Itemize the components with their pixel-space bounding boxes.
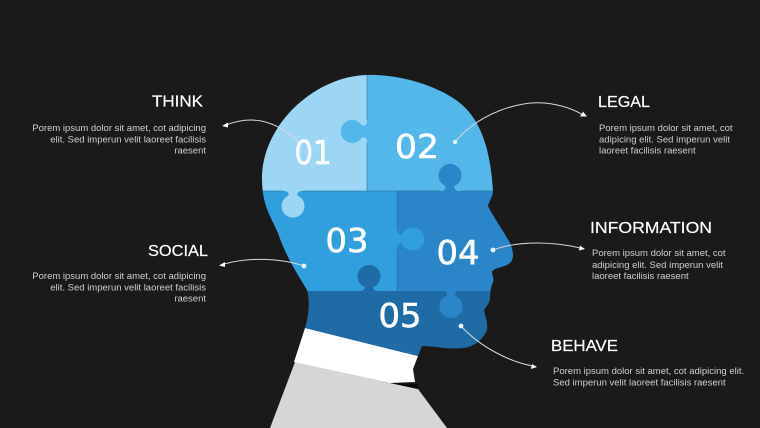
- text: legal: [599, 123, 733, 156]
- number 02: 02: [395, 127, 439, 166]
- connector: information: [491, 243, 585, 252]
- piece 03: [250, 191, 397, 291]
- heading: social: SOCIAL: [148, 243, 208, 260]
- text: think: elit. Sed imperun velit laoreet facilisis: [50, 134, 206, 146]
- knob: 01 into 03: [282, 190, 304, 218]
- knob: 04 into 02: [438, 164, 462, 192]
- number 01: 01: [294, 133, 332, 172]
- text: information: [592, 248, 726, 282]
- connector: think: [222, 120, 298, 141]
- text: social: [32, 271, 206, 304]
- piece 01: [262, 75, 367, 191]
- text: social: elit. Sed imperun velit laoreet facilisis: [50, 282, 206, 294]
- heading: legal: LEGAL: [598, 94, 650, 111]
- tie shadow: [390, 383, 418, 389]
- text: legal: laoreet facilisis raesent: [599, 146, 696, 156]
- text: behave: [553, 366, 744, 388]
- piece 04: [397, 191, 522, 291]
- text: legal: Porem ipsum dolor sit amet, cot: [599, 123, 733, 134]
- text: behave: Porem ipsum dolor sit amet, cot adipicing elit.: [553, 366, 744, 377]
- text: think: raesent: [174, 146, 206, 156]
- knob: 05 into 03: [358, 265, 380, 292]
- number 04: 04: [436, 233, 480, 272]
- piece 05: [305, 291, 490, 356]
- text: legal: adipicing elit. Sed imperun velit: [599, 134, 730, 146]
- text: think: Porem ipsum dolor sit amet, cot adipicing: [32, 123, 206, 134]
- connector: social: [219, 259, 306, 268]
- text: information: adipicing elit. Sed imperun velit: [592, 260, 723, 271]
- heading: behave: BEHAVE: [551, 338, 618, 355]
- text: information: Porem ipsum dolor sit amet, cot: [592, 248, 726, 259]
- text: behave: Sed imperun velit laoreet facilisis raesent: [553, 378, 726, 388]
- suit jacket: [270, 362, 447, 428]
- knob: 02 into 01: [341, 120, 368, 143]
- connector: behave: [459, 324, 537, 369]
- number 03: 03: [326, 221, 368, 260]
- text: social: Porem ipsum dolor sit amet, cot adipicing: [32, 271, 206, 282]
- number 05: 05: [378, 296, 422, 335]
- knob: 03 into 04: [396, 227, 424, 250]
- seams: [262, 75, 493, 291]
- knob: 04 into 05: [440, 290, 463, 318]
- shirt collar: [294, 328, 418, 383]
- connector: legal: [453, 103, 587, 144]
- piece 02: [367, 74, 493, 191]
- heading: think: THINK: [152, 94, 203, 110]
- text: information: laoreet facilisis raesent: [592, 271, 689, 282]
- text: think: [32, 123, 206, 156]
- heading: information: INFORMATION: [590, 220, 712, 237]
- head puzzle: [262, 74, 514, 356]
- text: social: raesent: [174, 294, 206, 304]
